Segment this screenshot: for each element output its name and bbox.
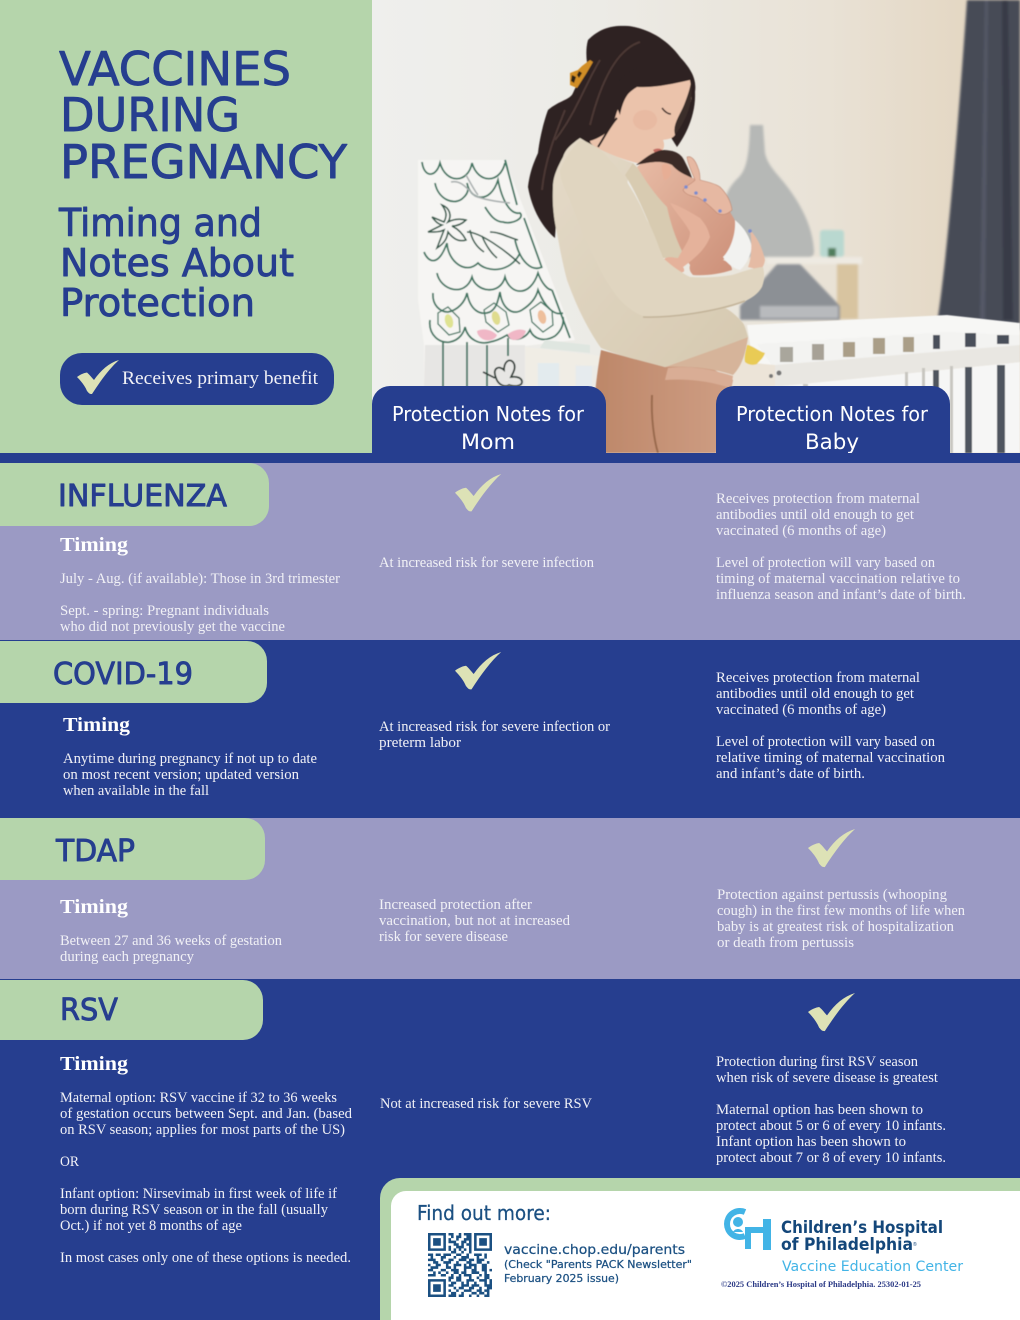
legend: receives primary benefit: Receives primary benefit	[122, 368, 319, 389]
subtitle: Protection	[60, 281, 255, 325]
panel: covid-19	[0, 640, 1020, 818]
website and newsletter note: (Check "Parents PACK Newsletter"	[504, 1258, 692, 1271]
header tab: protection notes for baby: Baby	[805, 430, 859, 454]
title: PREGNANCY	[60, 135, 348, 189]
pants	[594, 350, 733, 453]
tdap timing	[60, 896, 282, 965]
rsv baby notes: Infant option has been shown to	[716, 1134, 906, 1150]
rsv timing: born during RSV season or in the fall (usually	[60, 1202, 328, 1218]
subtitle: Notes About	[60, 241, 294, 285]
tdap mom notes: risk for severe disease	[379, 929, 508, 945]
influenza timing: July - Aug. (if available): Those in 3rd trimester	[60, 571, 340, 587]
website and newsletter note: vaccine.chop.edu/parents	[504, 1242, 685, 1258]
covid mom notes	[379, 719, 610, 751]
influenza baby notes: influenza season and infant’s date of birth.	[716, 587, 966, 603]
photo: mother holding newborn	[372, 0, 1020, 453]
panel: influenza: INFLUENZA	[58, 479, 227, 514]
covid baby notes: antibodies until old enough to get	[716, 686, 915, 702]
panel: rsv	[0, 979, 1020, 1320]
baby	[637, 155, 737, 275]
crib	[525, 315, 1020, 453]
tdap baby notes: baby is at greatest risk of hospitalization	[717, 919, 954, 935]
covid baby notes: Level of protection will vary based on	[716, 734, 935, 750]
logo: children's hospital of philadelphia: Children’s Hospital	[781, 1218, 943, 1237]
covid timing	[63, 714, 317, 799]
website and newsletter note	[504, 1242, 692, 1285]
influenza baby notes: timing of maternal vaccination relative to	[716, 571, 960, 587]
tdap timing: Timing	[60, 896, 128, 918]
covid timing: on most recent version; updated version	[63, 767, 299, 783]
influenza timing: Timing	[60, 534, 128, 556]
covid baby notes: Receives protection from maternal	[716, 670, 920, 686]
rsv timing: Oct.) if not yet 8 months of age	[60, 1218, 242, 1234]
rsv timing: of gestation occurs between Sept. and Jan. (based	[60, 1106, 352, 1122]
influenza baby notes: Level of protection will vary based on	[716, 555, 935, 571]
covid timing: Anytime during pregnancy if not up to date	[63, 751, 317, 767]
mural: painted scales	[418, 160, 575, 388]
rsv baby notes: Protection during first RSV season	[716, 1054, 918, 1070]
title: VACCINES	[59, 42, 291, 96]
panel: covid-19: COVID-19	[53, 657, 193, 692]
header tab: protection notes for mom: Protection Notes for	[392, 402, 585, 426]
title	[59, 42, 348, 189]
rsv timing: Maternal option: RSV vaccine if 32 to 36 weeks	[60, 1090, 337, 1106]
header tab: protection notes for mom	[372, 386, 606, 454]
covid baby notes: vaccinated (6 months of age)	[716, 702, 886, 718]
rsv timing: In most cases only one of these options is needed.	[60, 1250, 351, 1266]
hair clip	[570, 60, 593, 88]
rsv timing	[60, 1053, 352, 1266]
tdap timing: Between 27 and 36 weeks of gestation	[60, 933, 282, 949]
tdap mom notes: vaccination, but not at increased	[379, 913, 570, 929]
header tab: protection notes for baby: Protection Notes for	[736, 402, 929, 426]
mother figure	[528, 26, 765, 453]
website and newsletter note: February 2025 issue)	[504, 1272, 619, 1285]
influenza timing	[60, 534, 340, 635]
qr code	[428, 1233, 492, 1297]
face and neck	[590, 80, 692, 164]
panel: title background	[0, 0, 372, 453]
subtitle: Timing and	[58, 201, 262, 245]
tdap timing: during each pregnancy	[60, 949, 194, 965]
rsv baby notes: protect about 7 or 8 of every 10 infants.	[716, 1150, 946, 1166]
mother's hands	[683, 157, 732, 214]
panel: tdap	[0, 818, 1020, 979]
influenza baby notes: antibodies until old enough to get	[716, 507, 915, 523]
covid baby notes	[716, 670, 945, 782]
divider band under header	[0, 453, 1020, 463]
rsv baby check	[808, 993, 855, 1031]
find out more heading: Find out more:	[417, 1201, 551, 1225]
influenza baby notes	[716, 491, 966, 603]
rsv mom notes: Not at increased risk for severe RSV	[380, 1096, 592, 1112]
logo: children's hospital of philadelphia: ®	[913, 1241, 917, 1248]
chest wrap	[625, 163, 688, 258]
header tab: protection notes for mom: Mom	[461, 430, 515, 454]
rsv timing: Infant option: Nirsevimab in first week of life if	[60, 1186, 337, 1202]
hair front sweep	[612, 60, 690, 115]
covid baby notes: relative timing of maternal vaccination	[716, 750, 945, 766]
tdap baby notes: cough) in the first few months of life when	[717, 903, 965, 919]
covid timing: when available in the fall	[63, 783, 209, 799]
diaper	[723, 220, 752, 270]
influenza mom check	[455, 474, 501, 511]
covid timing: Timing	[63, 714, 130, 736]
sleeve	[560, 140, 764, 317]
rsv baby notes: Maternal option has been shown to	[716, 1102, 923, 1118]
rsv baby notes: when risk of severe disease is greatest	[716, 1070, 939, 1086]
tdap mom notes	[379, 897, 570, 945]
subtitle	[58, 201, 294, 325]
logo: children's hospital of philadelphia	[727, 1211, 963, 1275]
logo: children's hospital of philadelphia: of Philadelphia	[781, 1235, 913, 1254]
covid baby notes: and infant’s date of birth.	[716, 766, 865, 782]
tdap baby notes	[717, 887, 965, 951]
influenza timing: who did not previously get the vaccine	[60, 619, 285, 635]
panel: influenza	[0, 463, 1020, 640]
sweater body	[553, 138, 748, 367]
influenza mom notes: At increased risk for severe infection	[379, 555, 594, 571]
legend: receives primary benefit	[60, 353, 334, 405]
influenza timing: Sept. - spring: Pregnant individuals	[60, 603, 269, 619]
title: DURING	[60, 88, 240, 142]
header tab: protection notes for baby	[716, 386, 950, 454]
logo: children's hospital of philadelphia: Vaccine Education Center	[782, 1259, 963, 1275]
rsv timing: on RSV season; applies for most parts of the US)	[60, 1122, 345, 1138]
panel: tdap: TDAP	[55, 834, 135, 869]
covid mom notes: preterm labor	[379, 735, 461, 751]
copyright: ©2025 Children’s Hospital of Philadelphia. 25302-01-25	[721, 1279, 921, 1289]
panel: find out more footer	[380, 1178, 1020, 1320]
covid mom check	[455, 652, 501, 689]
influenza baby notes: vaccinated (6 months of age)	[716, 523, 886, 539]
tdap baby check	[808, 829, 855, 867]
tdap baby notes: or death from pertussis	[717, 935, 854, 951]
tdap mom notes: Increased protection after	[379, 897, 532, 913]
rsv timing: OR	[60, 1154, 79, 1170]
tdap baby notes: Protection against pertussis (whooping	[717, 887, 947, 903]
rsv timing: Timing	[60, 1053, 128, 1075]
back hair	[528, 26, 695, 238]
influenza baby notes: Receives protection from maternal	[716, 491, 920, 507]
rsv baby notes: protect about 5 or 6 of every 10 infants.	[716, 1118, 946, 1134]
covid mom notes: At increased risk for severe infection or	[379, 719, 610, 735]
rsv baby notes	[716, 1054, 946, 1166]
panel: rsv: RSV	[60, 993, 118, 1028]
